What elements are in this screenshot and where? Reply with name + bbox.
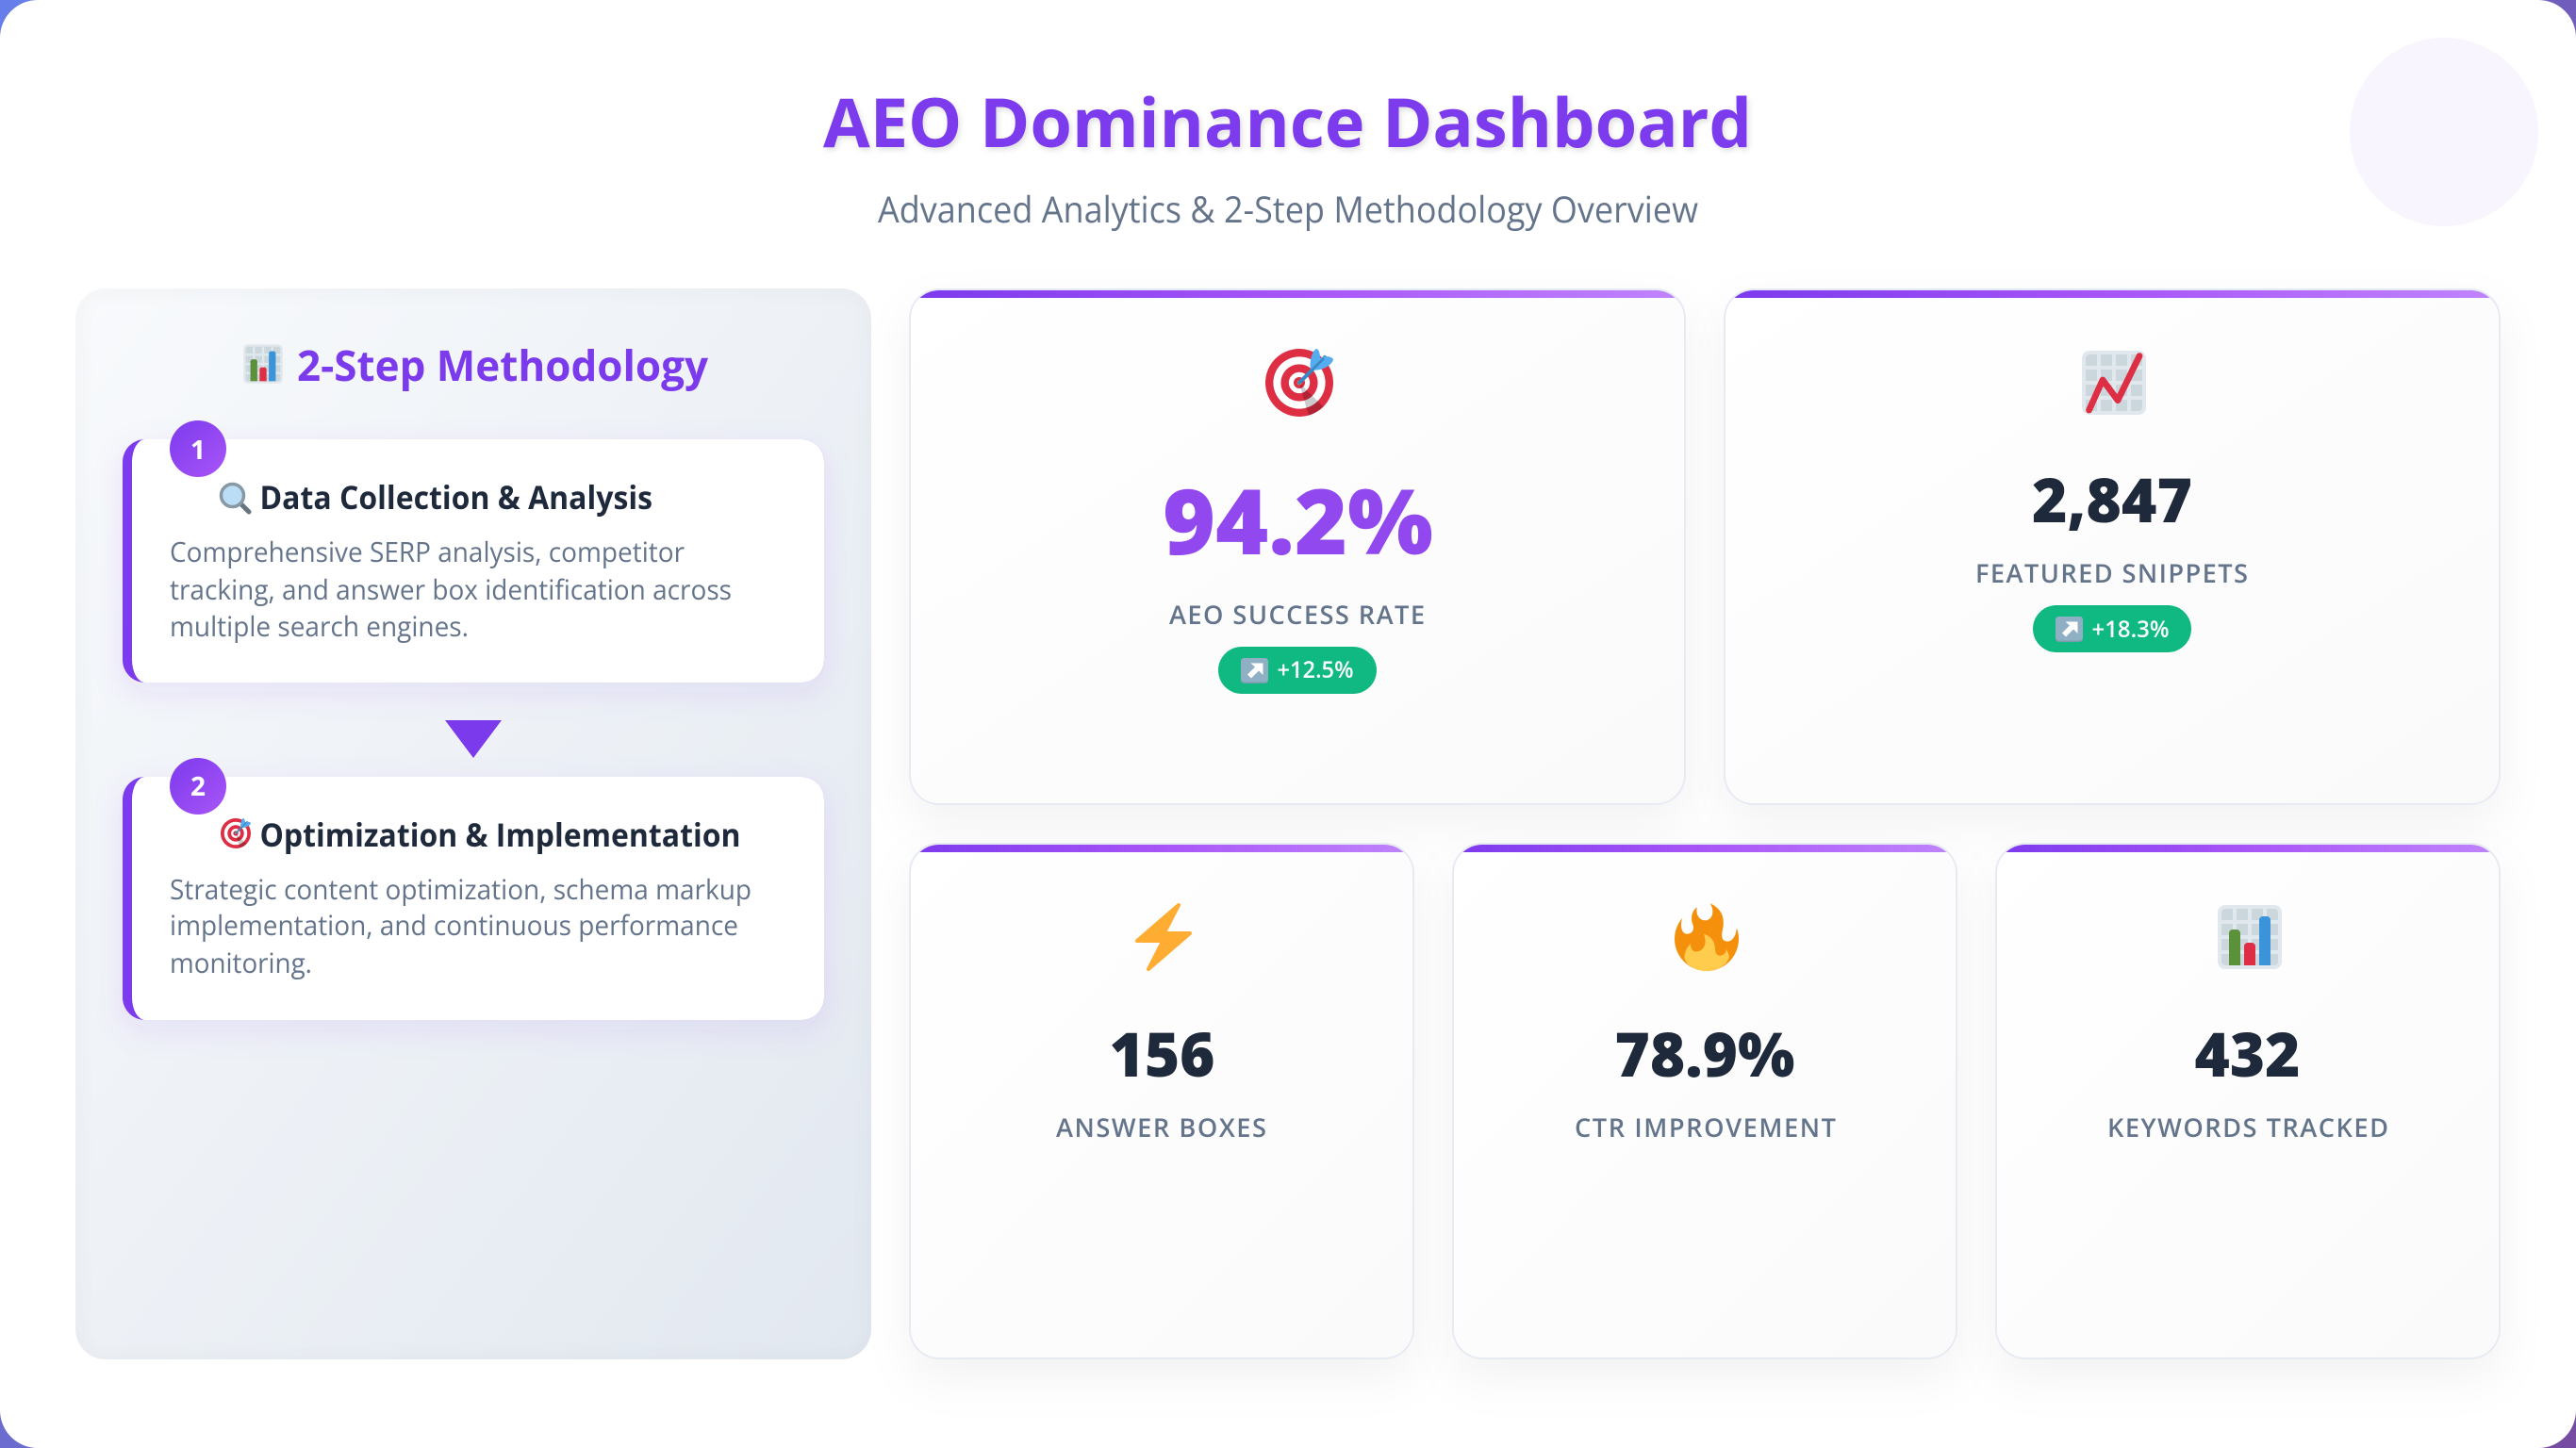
step 2 title: Optimization & Implementation	[260, 813, 741, 856]
label: AEO SUCCESS RATE	[1169, 597, 1425, 632]
metric card: featured snippets	[1725, 289, 2500, 804]
step 2 description: Strategic content optimization, schema markup	[170, 871, 751, 908]
icon: magnifying glass	[219, 483, 251, 515]
header	[823, 75, 1752, 234]
change badge: +18.3%	[2091, 614, 2169, 645]
step 2 number badge	[170, 758, 226, 814]
panel heading: 2-Step Methodology	[297, 337, 708, 394]
icon: fire	[1675, 903, 1739, 971]
decorative circle	[2350, 38, 2538, 226]
metric card: keywords tracked	[1996, 844, 2500, 1358]
arrow: step 1 to step 2	[445, 720, 502, 758]
step 1 card	[123, 420, 824, 683]
value: 156	[1109, 1012, 1214, 1095]
step 2 description: monitoring.	[170, 945, 312, 981]
value: 2,847	[2032, 458, 2192, 541]
step 1 description: Comprehensive SERP analysis, competitor	[170, 534, 685, 570]
icon: target	[221, 818, 251, 848]
subtitle: Advanced Analytics & 2-Step Methodology Overview	[878, 185, 1698, 234]
change badge: +12.5%	[1277, 654, 1354, 685]
metric card: answer boxes	[910, 844, 1413, 1358]
step 1 title: Data Collection & Analysis	[260, 475, 652, 518]
panel: 2-step methodology	[75, 288, 871, 1359]
label: CTR IMPROVEMENT	[1575, 1110, 1836, 1144]
value: 78.9%	[1614, 1012, 1795, 1095]
label: FEATURED SNIPPETS	[1975, 555, 2248, 590]
step 1 number badge	[170, 420, 226, 477]
metric card: CTR improvement	[1453, 844, 1957, 1358]
icon: bar chart	[243, 344, 283, 384]
step 1 description: tracking, and answer box identification across	[170, 571, 732, 608]
step 2 description	[170, 871, 751, 981]
step 1 description: multiple search engines.	[170, 608, 469, 645]
step 1 number badge: 1	[190, 432, 206, 468]
step 2 number badge: 2	[190, 768, 206, 804]
icon: chart increasing	[2082, 351, 2146, 415]
value: 432	[2195, 1012, 2301, 1095]
title: AEO Dominance Dashboard	[823, 75, 1752, 168]
icon: bar chart	[2218, 905, 2282, 969]
change badge	[1218, 647, 1377, 694]
change badge	[2033, 605, 2191, 652]
icon: target	[1265, 349, 1333, 417]
label: KEYWORDS TRACKED	[2107, 1110, 2388, 1144]
step 1 description	[170, 534, 732, 645]
step 2 description: implementation, and continuous performance	[170, 907, 738, 944]
metric card: AEO success rate	[910, 289, 1685, 804]
step 2 card	[123, 758, 824, 1020]
icon: lightning	[1135, 903, 1192, 971]
label: ANSWER BOXES	[1056, 1110, 1266, 1144]
value: 94.2%	[1163, 458, 1433, 582]
